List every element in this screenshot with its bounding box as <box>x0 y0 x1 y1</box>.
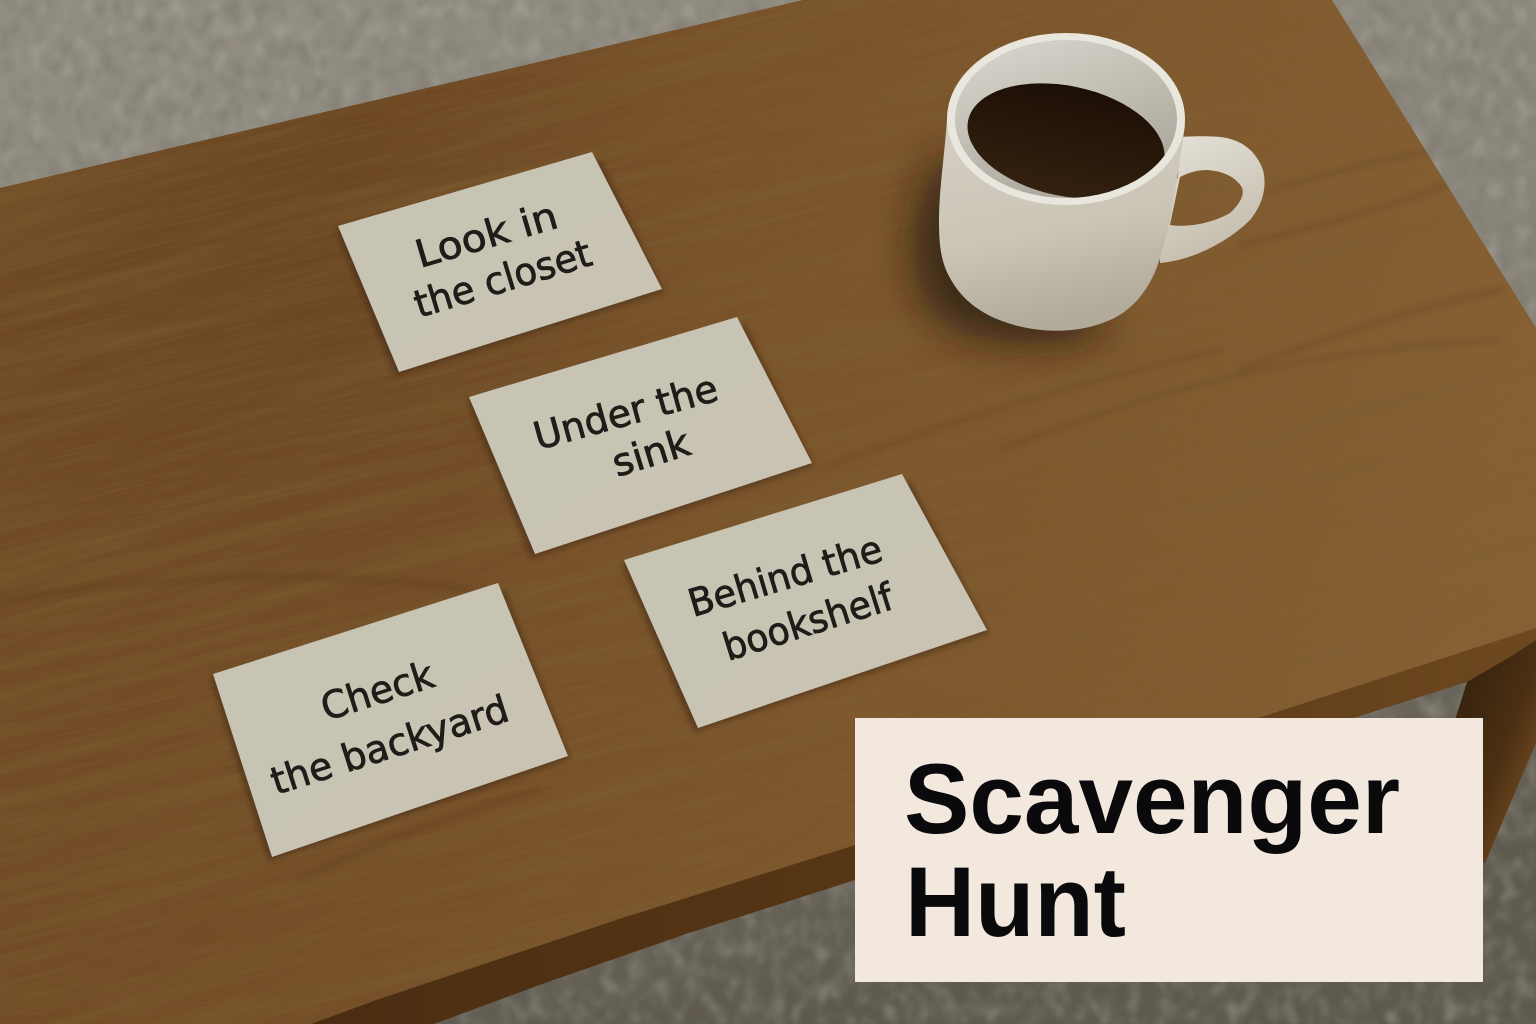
card: look in the closet: Look in <box>410 193 563 277</box>
card: behind the bookshelf: Behind the <box>683 527 887 626</box>
mug body <box>939 120 1185 331</box>
mug shadow <box>913 150 1110 344</box>
title text: Scavenger <box>904 743 1400 854</box>
card: behind the bookshelf: bookshelf <box>717 574 900 670</box>
card: check the backyard: Check <box>315 653 439 730</box>
card: under the sink <box>469 317 812 554</box>
table apron edge <box>311 628 1536 1024</box>
title text <box>904 743 1400 957</box>
mug rim <box>947 33 1185 205</box>
card: under the sink: sink <box>607 420 695 486</box>
card: check the backyard <box>213 583 568 857</box>
coffee mug <box>939 33 1265 331</box>
card: under the sink: Under the <box>529 366 723 459</box>
coffee surface <box>968 83 1164 198</box>
card: check the backyard: the backyard <box>265 687 514 804</box>
card: look in the closet: the closet <box>409 231 597 327</box>
mug interior <box>955 40 1177 198</box>
title panel <box>855 718 1483 982</box>
title text: Hunt <box>905 846 1126 957</box>
table leg <box>1450 640 1536 863</box>
mug handle <box>1160 136 1265 263</box>
card shadows <box>211 160 989 861</box>
card: behind the bookshelf <box>624 474 987 728</box>
card: look in the closet <box>338 152 662 372</box>
